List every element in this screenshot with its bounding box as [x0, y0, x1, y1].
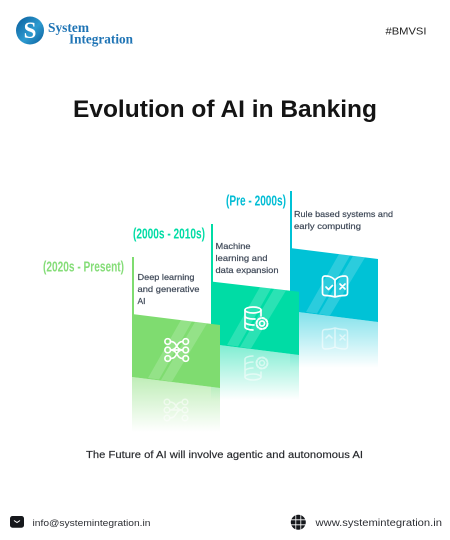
icon reflection: open book: [322, 328, 348, 349]
description: Deep learning: [138, 272, 195, 282]
icon: open book check and cross: [322, 276, 348, 297]
stage: Pre-2000s: [226, 191, 393, 368]
description: AI: [138, 296, 146, 306]
marker bar: [211, 224, 213, 282]
panel: blue: [290, 248, 378, 322]
description: early computing: [294, 221, 361, 231]
icon: database and gear: [245, 307, 268, 330]
description: and generative: [138, 284, 200, 294]
logo: System Integration: [16, 16, 133, 48]
reflection: green panel: [132, 377, 220, 432]
logo: System Integration: S: [24, 18, 36, 43]
panel sheen: [148, 320, 207, 382]
contact: email: [10, 516, 150, 529]
contact: website: [291, 515, 442, 530]
icon reflection: database and gear: [245, 356, 268, 380]
panel sheen: [306, 254, 365, 316]
stage: 2000s - 2010s: [133, 224, 299, 400]
icon reflection: neural network: [164, 399, 188, 421]
reflection: blue panel: [290, 311, 378, 368]
panel: green: [132, 314, 220, 388]
marker bar: [290, 191, 292, 249]
footnote: The Future of AI will involve agentic and autonomous AI: [86, 450, 363, 461]
label: Pre - 2000s: (Pre - 2000s): [226, 194, 286, 210]
hashtag: #BMVSI: [386, 26, 426, 38]
description: Rule based systems and: [294, 209, 393, 219]
description: learning and: [216, 253, 268, 263]
stage: 2020s - Present: [43, 257, 220, 432]
icon: envelope: [10, 516, 24, 528]
logo: System Integration: System: [48, 21, 89, 36]
description: Machine: [216, 241, 251, 251]
description: data expansion: [216, 265, 279, 275]
website address: www.systemintegration.in: [314, 518, 442, 529]
email address: info@systemintegration.in: [32, 518, 150, 529]
panel sheen: [227, 287, 286, 348]
panel: teal: [211, 282, 299, 355]
icon: neural network: [165, 339, 188, 361]
label: 2020s - Present: (2020s - Present): [43, 260, 124, 276]
logo: System Integration: Integration: [69, 32, 133, 48]
icon: globe: [291, 515, 306, 530]
marker bar: [132, 257, 134, 315]
label: 2000s - 2010s: (2000s - 2010s): [133, 226, 205, 242]
reflection: teal panel: [211, 344, 299, 400]
title: Evolution of AI in Banking: [73, 96, 377, 123]
